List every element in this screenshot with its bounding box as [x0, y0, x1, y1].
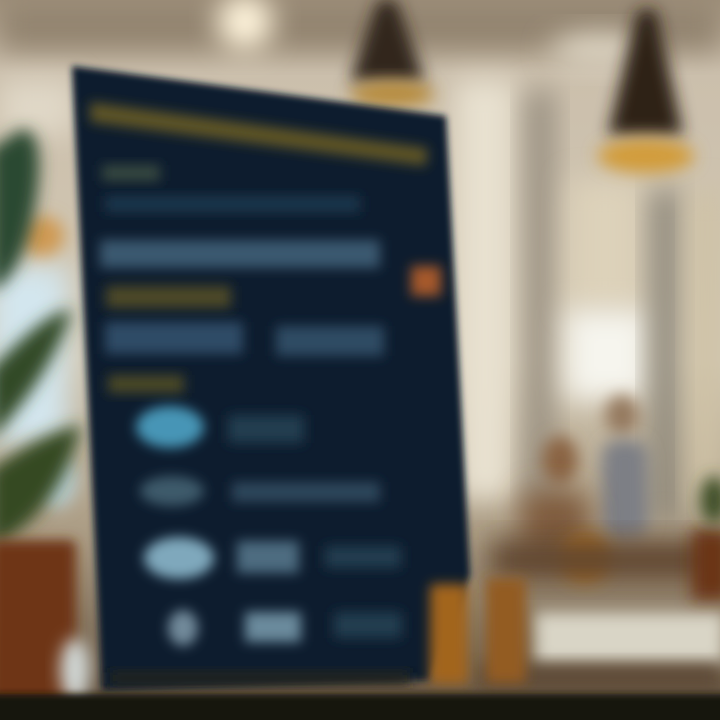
heading: yellow title bar	[90, 102, 428, 166]
menu board	[72, 66, 470, 690]
row 4	[168, 610, 402, 646]
board body	[72, 66, 470, 690]
plant leaves	[0, 130, 82, 545]
pendant lamp: right	[598, 10, 694, 173]
pendant lamp: centre	[350, 0, 434, 107]
lamp glow: left	[20, 216, 64, 256]
footer line	[110, 672, 410, 684]
window glow behind plant	[0, 265, 77, 508]
label: third section	[108, 375, 184, 393]
text lines: first section	[100, 196, 380, 268]
row 1	[136, 406, 304, 448]
text blocks: second section	[105, 322, 384, 356]
background people at table	[490, 395, 720, 582]
label: second section	[106, 286, 231, 308]
table surface	[480, 612, 720, 690]
orange badge	[411, 266, 441, 296]
row 3	[144, 537, 401, 579]
label: first section	[102, 165, 160, 181]
terracotta pot	[0, 540, 76, 705]
wooden cups	[430, 578, 526, 684]
counter edge	[0, 694, 720, 720]
right plant pot	[692, 476, 720, 600]
row 2	[140, 476, 380, 506]
